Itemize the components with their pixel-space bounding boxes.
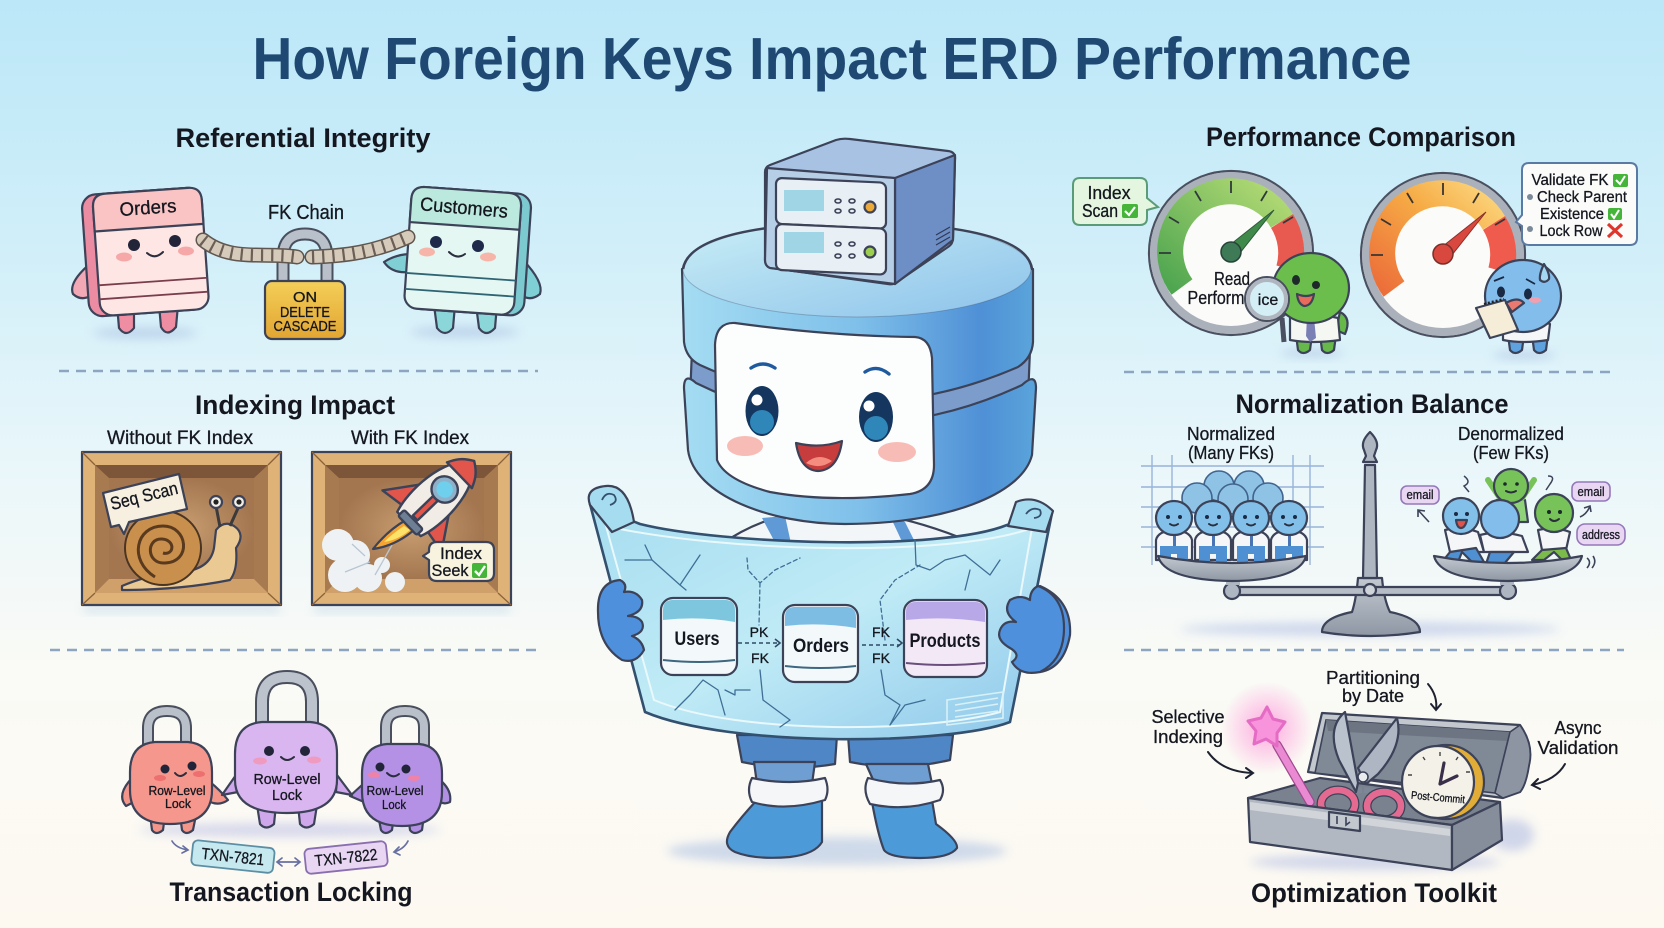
- head: upper cylinder: [682, 269, 1033, 402]
- figure: [1195, 501, 1231, 562]
- balance scale: [1224, 432, 1516, 636]
- lock character: right: Lock: [382, 797, 406, 812]
- crowd: denormalized: [1442, 469, 1573, 564]
- head: lower cylinder: [684, 379, 1036, 524]
- heading: optimization toolkit: Optimization Toolkit: [1251, 878, 1497, 908]
- shadow under mascot: [667, 837, 1007, 865]
- callout: fk validation checklist: Lock Row: [1540, 223, 1603, 240]
- panel: referential integrity: [72, 123, 541, 339]
- padlock: on delete cascade: CASCADE: [274, 318, 336, 335]
- label: read performance: Read: [1214, 269, 1250, 289]
- toolbox lid: [1308, 713, 1530, 798]
- labels: pk fk: PK: [750, 624, 769, 640]
- lock character: right: [350, 711, 450, 833]
- scroll curl: left: [589, 486, 634, 532]
- callout: fk validation checklist: Existence: [1540, 206, 1604, 223]
- callout: index seek: [423, 542, 494, 581]
- label: denormalized: [1458, 424, 1564, 463]
- lock character: middle: [222, 677, 352, 828]
- title block on map: [947, 692, 1003, 725]
- label: normalized: (Many FKs): [1188, 443, 1274, 463]
- labels: pk fk: [750, 624, 891, 666]
- rocket: [373, 430, 504, 556]
- lock character: right: Row-Level: [366, 783, 424, 798]
- heading: normalization balance: Normalization Balance: [1236, 389, 1508, 419]
- scissors: [1321, 712, 1401, 820]
- title: How Foreign Keys Impact ERD Performance: [252, 26, 1412, 92]
- heading: referential integrity: Referential Integrity: [176, 123, 430, 153]
- callout: index seek: Seek: [432, 561, 469, 580]
- erd map: [589, 486, 1053, 739]
- label: without fk index: Without FK Index: [107, 428, 253, 449]
- callout: index seek: Index: [440, 544, 482, 563]
- server on head: [765, 139, 955, 284]
- snail: [122, 496, 245, 590]
- magnifier: ice: [1258, 292, 1278, 309]
- callout: fk validation checklist: Check Parent: [1537, 189, 1628, 206]
- head: band: [690, 350, 1030, 434]
- hand: left: [598, 580, 644, 661]
- figure: [1156, 501, 1192, 562]
- tag: txn-7821: TXN-7821: [201, 846, 265, 869]
- table: orders: [783, 605, 858, 682]
- shadow under locks: [140, 823, 440, 837]
- tags: email and address: [1401, 482, 1625, 545]
- lock character: left: [122, 711, 228, 833]
- label: partitioning by date: Partitioning: [1326, 668, 1420, 688]
- note: seq scan: Seq Scan: [108, 478, 180, 514]
- table: products: Products: [910, 631, 980, 652]
- toolbox body: [1248, 798, 1502, 870]
- callout: index scan: [1073, 178, 1158, 225]
- label: async validation: Async: [1554, 718, 1602, 738]
- table: users: [661, 598, 737, 675]
- label: partitioning by date: by Date: [1342, 686, 1404, 706]
- grid behind normalized group: [1141, 455, 1324, 565]
- gauge: read performance: [1149, 171, 1313, 335]
- scroll curl: right: [1008, 499, 1053, 532]
- toolbox interior: [1248, 778, 1500, 825]
- tag: txn-7821: [191, 840, 275, 873]
- label: customers: Customers: [419, 194, 509, 223]
- table: orders: Orders: [793, 636, 849, 657]
- face: [715, 323, 934, 498]
- callout: fk validation checklist: [1516, 163, 1637, 245]
- panel: performance comparison: [1073, 122, 1637, 359]
- toolbox shadow: [1250, 819, 1534, 870]
- hand: right: [999, 586, 1064, 673]
- lock character: left: Row-Level: [148, 783, 206, 798]
- padlock: on delete cascade: ON: [293, 289, 317, 306]
- lock character: middle: Row-Level: [254, 771, 320, 788]
- arrows: callouts to tools: [1208, 684, 1565, 789]
- tags: email and address: email: [1578, 484, 1605, 499]
- lock character: middle: Lock: [272, 787, 302, 804]
- tag: txn-7822: TXN-7822: [314, 847, 378, 870]
- sleeve behind map: [1040, 586, 1070, 672]
- character: orders table: [72, 187, 209, 333]
- callout: index scan: Scan: [1082, 201, 1118, 221]
- tags: email and address: address: [1582, 527, 1620, 542]
- padlock: on delete cascade: [265, 234, 345, 339]
- label: async validation: Validation: [1538, 738, 1618, 758]
- clock: post-commit: Post-Commit: [1410, 790, 1465, 806]
- cracks: [625, 540, 1000, 727]
- padlock: on delete cascade: DELETE: [280, 304, 330, 321]
- label: denormalized: Denormalized: [1458, 424, 1564, 444]
- label: denormalized: (Few FKs): [1473, 443, 1549, 463]
- label: partitioning by date: [1326, 668, 1420, 706]
- labels: pk fk: FK: [872, 650, 891, 666]
- table: users: Users: [674, 629, 720, 650]
- label: read performance: Perform: [1188, 288, 1244, 308]
- tag: txn-7822: [304, 841, 388, 874]
- panel: transaction locking: [122, 677, 450, 907]
- panel: normalization balance: [1141, 389, 1625, 636]
- labels: pk fk: FK: [751, 650, 770, 666]
- magnifier: [1245, 277, 1289, 342]
- frame: rocket crate: [312, 430, 511, 612]
- shadow under cards: [93, 326, 519, 339]
- label: with fk index: With FK Index: [351, 428, 469, 449]
- tags: email and address: email: [1406, 487, 1434, 502]
- character: blue worried writer: [1476, 260, 1561, 359]
- pan: left: [1158, 556, 1306, 581]
- gauge: write performance: [1361, 173, 1525, 337]
- legs and boots: [727, 735, 957, 858]
- label: fk chain: FK Chain: [268, 202, 344, 224]
- callout: fk validation checklist: Validate FK: [1532, 172, 1609, 189]
- arrows: scattered attributes: [1418, 506, 1595, 568]
- label: read performance: [1188, 269, 1250, 308]
- arrows: pk to fk links: [738, 639, 902, 647]
- figure: [1233, 501, 1269, 562]
- label: async validation: [1538, 718, 1618, 758]
- mascot: database character: [589, 139, 1070, 865]
- panel: optimization toolkit: [1152, 668, 1618, 908]
- lock character: left: Lock: [165, 796, 191, 811]
- callout: index scan: Index: [1088, 183, 1130, 203]
- figure: [1271, 501, 1307, 562]
- smoke: [322, 529, 405, 592]
- label: normalized: [1187, 424, 1275, 463]
- heading: indexing impact: Indexing Impact: [195, 390, 395, 420]
- crowd: normalized: [1156, 471, 1307, 562]
- character: customers table: [384, 186, 541, 333]
- label: orders: Orders: [119, 196, 177, 221]
- label: selective indexing: Indexing: [1153, 727, 1223, 747]
- table: products: [904, 600, 987, 677]
- heading: transaction locking: Transaction Locking: [170, 877, 412, 907]
- magic wand: [1221, 682, 1313, 802]
- head: top disk: [683, 221, 1031, 317]
- labels: pk fk: FK: [872, 624, 891, 640]
- pan: right: [1434, 556, 1582, 581]
- label: normalized: Normalized: [1187, 424, 1275, 444]
- body: shirt: [720, 510, 985, 548]
- note: seq scan: [103, 474, 187, 534]
- character: green inspector: [1273, 253, 1349, 357]
- label: selective indexing: [1152, 707, 1224, 747]
- clock: post-commit: [1402, 745, 1484, 819]
- rope: fk chain: [203, 237, 408, 257]
- frame: snail crate: [82, 452, 281, 612]
- scale shadow: [1180, 622, 1560, 636]
- label: selective indexing: Selective: [1152, 707, 1224, 727]
- arrows: lock to tags: [172, 841, 408, 866]
- heading: performance comparison: Performance Comparison: [1206, 122, 1516, 152]
- panel: indexing impact: [82, 390, 511, 612]
